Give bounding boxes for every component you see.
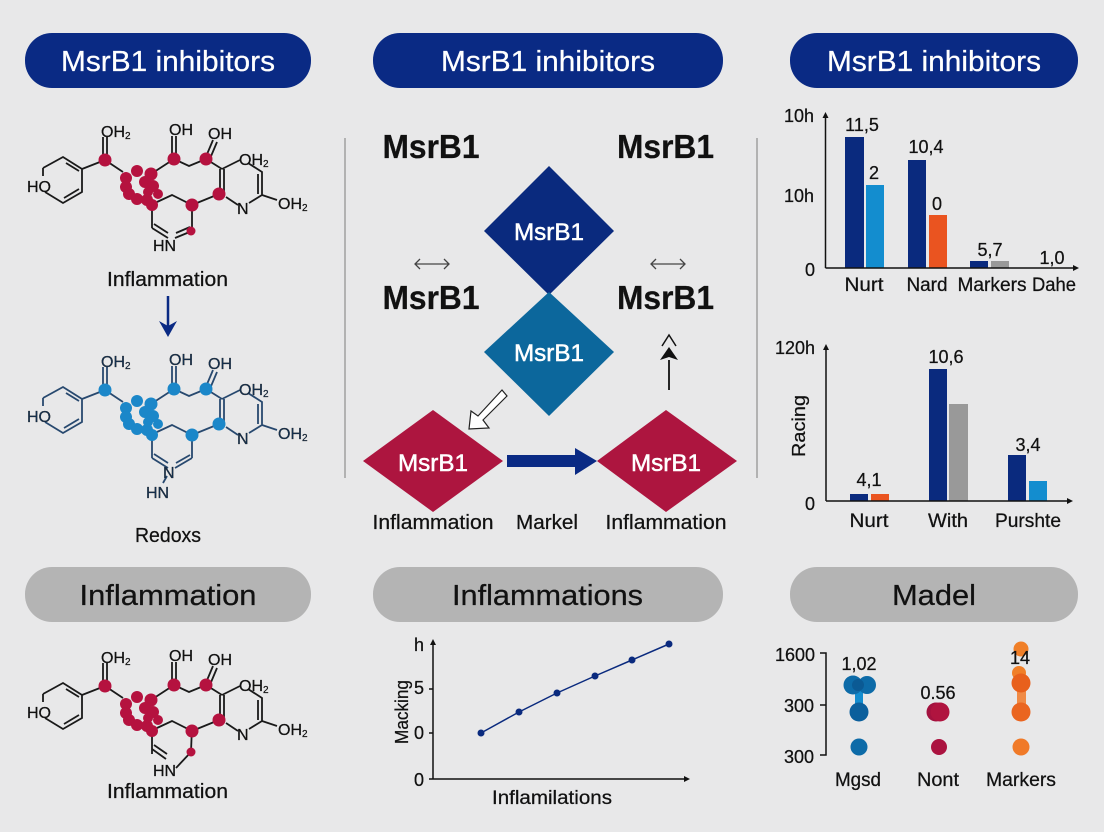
dot plot: bottom right: Mgsd xyxy=(835,770,881,791)
molecule: inflammation top: HN xyxy=(153,238,176,255)
bar chart: top right: Nard xyxy=(906,275,948,296)
section pill: left gray: Inflammation xyxy=(80,580,256,612)
header pill: left xyxy=(25,33,311,88)
molecule: redox blue xyxy=(27,352,308,502)
molecule: redox blue: 2 xyxy=(125,361,131,372)
molecule: redox blue: N xyxy=(237,431,249,448)
dot plot: bottom right: Markers xyxy=(986,770,1056,791)
bar chart: top right: 5,7 xyxy=(977,240,1003,260)
arrow: navy right xyxy=(507,448,597,475)
bar chart: top right xyxy=(784,106,1079,296)
molecule: redox blue: 2 xyxy=(263,389,269,400)
line chart: Macking xyxy=(392,680,412,744)
bar chart: middle right: 10,6 xyxy=(928,347,964,367)
bar chart: middle right: 120h xyxy=(775,338,815,358)
bar chart: top right: 10,4 xyxy=(908,137,944,157)
section pill: right gray xyxy=(790,567,1078,622)
diamond: crimson right: MsrB1 xyxy=(631,450,701,477)
label: Redoxs: Redoxs xyxy=(135,525,201,547)
dot plot: bottom right: 0.56 xyxy=(920,683,956,703)
molecule: inflammation top: OH xyxy=(239,152,263,169)
bar chart: top right: 11,5 xyxy=(845,115,879,135)
section pill: right gray: Madel xyxy=(892,580,976,612)
label: Inflammation: Inflammation xyxy=(107,269,228,291)
dot plot: bottom right xyxy=(775,642,1056,791)
bar chart: top right: Markers xyxy=(958,275,1026,296)
bar chart: top right: 10h xyxy=(784,106,814,126)
bar chart: top right: 0 xyxy=(805,260,815,280)
molecule: redox blue: N xyxy=(163,465,175,482)
molecule: inflammation bottom: 2 xyxy=(302,729,308,740)
section pill: center gray: Inflammations xyxy=(452,580,643,612)
diamond: teal: MsrB1 xyxy=(514,340,584,367)
dot plot: bottom right: Nont xyxy=(917,770,960,791)
line chart: Inflamilations xyxy=(492,788,612,809)
line chart: 0 xyxy=(414,723,424,743)
molecule: redox blue: OH xyxy=(208,356,232,373)
heading: MsrB1 top right: MsrB1 xyxy=(617,128,714,165)
section pill: left gray xyxy=(25,567,311,622)
arrow: up double head xyxy=(660,335,678,390)
header pill: right: MsrB1 inhibitors xyxy=(827,46,1041,78)
dot plot: bottom right: 1600 xyxy=(775,645,815,665)
bar chart: top right: 1,0 xyxy=(1039,248,1065,268)
label: Markel: Markel xyxy=(516,512,578,534)
molecule: inflammation bottom: 2 xyxy=(263,685,269,696)
molecule: inflammation bottom: N xyxy=(237,727,249,744)
molecule: redox blue: OH xyxy=(101,354,125,371)
header pill: center: MsrB1 inhibitors xyxy=(441,46,655,78)
molecule: inflammation bottom: OH xyxy=(278,722,302,739)
molecule: redox blue: OH xyxy=(278,426,302,443)
bar chart: middle right: Nurt xyxy=(850,511,889,532)
diamond: crimson left: MsrB1 xyxy=(398,450,468,477)
diamond: crimson right xyxy=(597,410,737,512)
bar chart: middle right: Purshte xyxy=(995,511,1061,532)
label: Inflammation bottom: Inflammation xyxy=(107,781,228,803)
header pill: left: MsrB1 inhibitors xyxy=(61,46,275,78)
molecule: redox blue: 2 xyxy=(302,433,308,444)
line chart: h xyxy=(414,635,424,655)
molecule: inflammation top: OH xyxy=(101,124,125,141)
dot plot: bottom right: 300 xyxy=(784,747,814,767)
molecule: inflammation top: OH xyxy=(208,126,232,143)
molecule: inflammation bottom: 2 xyxy=(125,657,131,668)
diamond: teal xyxy=(484,292,614,416)
bar chart: middle right xyxy=(775,338,1073,532)
molecule: inflammation top: 2 xyxy=(302,203,308,214)
diamond: crimson left xyxy=(363,410,503,512)
section pill: center gray xyxy=(373,567,723,622)
bar chart: top right: 2 xyxy=(869,163,879,183)
dot plot: bottom right: 1,02 xyxy=(841,654,877,674)
label: Inflammation right: Inflammation xyxy=(606,512,726,534)
bar chart: middle right: Racing xyxy=(789,395,809,457)
bar chart: middle right: With xyxy=(928,511,968,532)
molecule: redox blue: OH xyxy=(239,382,263,399)
molecule: inflammation bottom: OH xyxy=(208,652,232,669)
dot plot: bottom right: 300 xyxy=(784,696,814,716)
molecule: inflammation bottom xyxy=(27,648,308,780)
arrow: hollow diagonal xyxy=(469,390,507,429)
bar chart: middle right: 0 xyxy=(805,494,815,514)
arrow: down navy xyxy=(159,296,177,337)
molecule: inflammation bottom: OH xyxy=(101,650,125,667)
line chart: 5 xyxy=(414,678,424,698)
bar chart: middle right: 3,4 xyxy=(1015,435,1041,455)
molecule: inflammation top: 2 xyxy=(125,131,131,142)
heading: MsrB1 top left: MsrB1 xyxy=(382,128,480,165)
molecule: redox blue: HN xyxy=(146,485,169,502)
molecule: inflammation top: N xyxy=(237,201,249,218)
dot plot: bottom right: 14 xyxy=(1010,648,1030,668)
molecule: inflammation top: 2 xyxy=(263,159,269,170)
molecule: inflammation top: OH xyxy=(169,122,193,139)
molecule: redox blue: OH xyxy=(169,352,193,369)
header pill: right xyxy=(790,33,1078,88)
line chart: 0 xyxy=(414,770,424,790)
molecule: inflammation top: HO xyxy=(27,179,51,196)
molecule: inflammation bottom: OH xyxy=(169,648,193,665)
bar chart: middle right: 4,1 xyxy=(856,470,882,490)
bar chart: top right: 10h xyxy=(784,186,814,206)
molecule: inflammation top xyxy=(27,122,308,255)
bar chart: top right: 0 xyxy=(932,194,942,214)
header pill: center xyxy=(373,33,723,88)
molecule: inflammation top: OH xyxy=(278,196,302,213)
line chart xyxy=(392,635,690,809)
molecule: inflammation bottom: HO xyxy=(27,705,51,722)
arrow: double left xyxy=(415,259,449,269)
diamond: navy: MsrB1 xyxy=(514,219,584,246)
label: Inflammation left: Inflammation xyxy=(372,512,494,534)
bar chart: top right: Dahe xyxy=(1032,275,1076,296)
diamond: navy xyxy=(484,166,614,295)
molecule: inflammation bottom: OH xyxy=(239,678,263,695)
heading: MsrB1 mid left: MsrB1 xyxy=(382,279,480,316)
bar chart: top right: Nurt xyxy=(844,275,884,296)
molecule: inflammation bottom: HN xyxy=(153,763,176,780)
heading: MsrB1 mid right: MsrB1 xyxy=(617,279,714,316)
molecule: redox blue: HO xyxy=(27,409,51,426)
arrow: double right xyxy=(651,259,685,269)
